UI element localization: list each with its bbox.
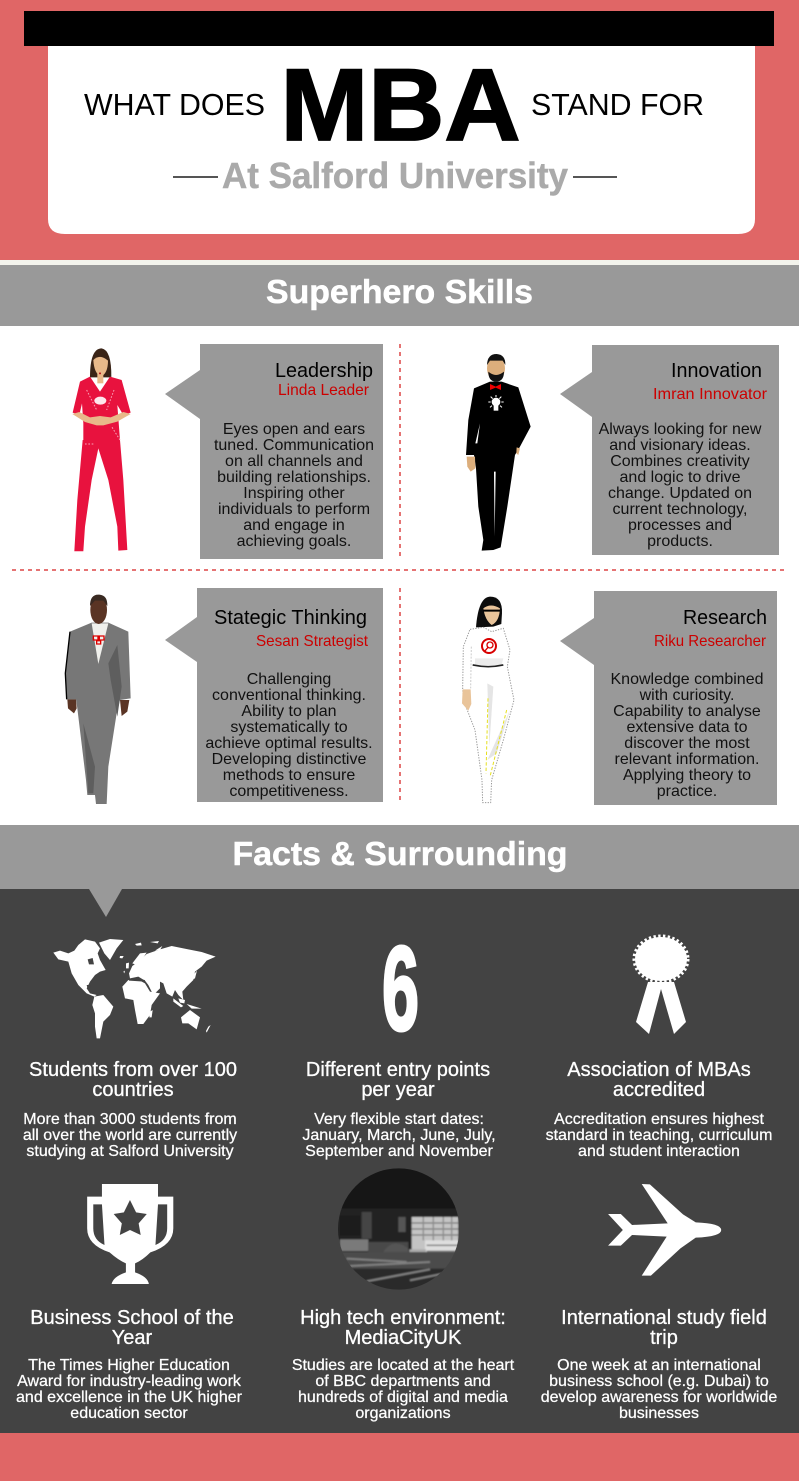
heading: accredited [613, 1079, 705, 1101]
icon: ribbon rosette [635, 937, 687, 1034]
description: Very flexible start dates: [314, 1111, 484, 1128]
description: standard in teaching, curriculum [546, 1127, 772, 1144]
subtitle: At Salford University [222, 155, 568, 196]
description: all over the world are currently [23, 1127, 237, 1144]
description: and excellence in the UK higher [16, 1389, 243, 1406]
description: One week at an international [557, 1357, 761, 1374]
description: relevant information. [615, 751, 759, 768]
description: processes and [628, 517, 732, 534]
figure: Linda Leader [72, 348, 131, 551]
fact: students [23, 939, 237, 1160]
description: current technology, [613, 501, 747, 518]
description: competitiveness. [229, 783, 349, 800]
title: STAND FOR [531, 87, 704, 122]
description: studying at Salford University [26, 1143, 234, 1160]
panel: facts background [0, 889, 799, 1433]
description: September and November [305, 1143, 494, 1160]
description: on all channels and [225, 453, 363, 470]
description: Ability to plan [241, 703, 337, 720]
icon: world map [53, 939, 216, 1038]
figure: Sesan Strategist [65, 595, 131, 804]
description: Inspiring other [243, 485, 345, 502]
fact: field trip [541, 1184, 777, 1422]
description: of BBC departments and [315, 1373, 491, 1390]
description: building relationships. [217, 469, 371, 486]
role title: Stategic Thinking [214, 607, 367, 629]
description: change. Updated on [608, 485, 752, 502]
panel: Research [462, 591, 777, 805]
description: business school (e.g. Dubai) to [549, 1373, 769, 1390]
description: Accreditation ensures highest [554, 1111, 764, 1128]
description: tuned. Communication [214, 437, 374, 454]
icon: airplane [608, 1184, 721, 1276]
description: education sector [70, 1405, 188, 1422]
heading: International study field [561, 1307, 767, 1329]
heading: trip [650, 1327, 678, 1349]
title: WHAT DOES [84, 87, 265, 122]
title: MBA [280, 48, 520, 162]
heading: Facts & Surrounding [0, 825, 799, 917]
role title: Innovation [671, 360, 762, 382]
role title: Research [683, 607, 767, 629]
panel: Strategic Thinking [65, 588, 383, 804]
fact: accreditation [546, 937, 772, 1160]
heading: Students from over 100 [29, 1059, 237, 1081]
speech box [165, 588, 383, 802]
description: More than 3000 students from [23, 1111, 237, 1128]
description: Eyes open and ears [223, 421, 365, 438]
description: Studies are located at the heart [292, 1357, 515, 1374]
panel: Innovation [466, 345, 779, 555]
heading: Superhero Skills [0, 265, 799, 326]
description: and logic to drive [620, 469, 741, 486]
character name: Sesan Strategist [256, 633, 369, 650]
description: achieve optimal results. [205, 735, 373, 752]
heading: Business School of the [30, 1307, 234, 1329]
header panel [0, 0, 799, 265]
heading: per year [361, 1079, 435, 1101]
description: discover the most [624, 735, 750, 752]
role title: Leadership [275, 360, 373, 382]
description: Award for industry-leading work [17, 1373, 242, 1390]
heading: countries [92, 1079, 174, 1101]
description: Challenging [247, 671, 331, 688]
description: and engage in [243, 517, 345, 534]
description: develop awareness for worldwide [541, 1389, 777, 1406]
heading: Year [112, 1327, 153, 1349]
figure: Riku Researcher [462, 597, 514, 803]
panel: Leadership [72, 344, 383, 559]
heading: Superhero Skills: Superhero Skills [266, 273, 533, 310]
character name: Riku Researcher [654, 633, 767, 650]
description: Combines creativity [610, 453, 750, 470]
description: Always looking for new [599, 421, 762, 438]
speech box [560, 345, 779, 555]
description: products. [647, 533, 713, 550]
heading: MediaCityUK [345, 1327, 462, 1349]
description: The Times Higher Education [28, 1357, 230, 1374]
description: systematically to [230, 719, 348, 736]
heading: Facts & Surrounding: Facts & Surrounding [232, 835, 568, 872]
title [84, 48, 704, 162]
character name: Imran Innovator [653, 386, 768, 403]
description: Knowledge combined [610, 671, 764, 688]
title card [24, 11, 774, 234]
icon: round city photo [335, 1165, 463, 1292]
description: conventional thinking. [212, 687, 366, 704]
footer strip [0, 1433, 799, 1481]
description: organizations [355, 1405, 451, 1422]
description: individuals to perform [218, 501, 370, 518]
description: Developing distinctive [212, 751, 366, 768]
heading: Different entry points [306, 1059, 490, 1081]
description: businesses [619, 1405, 699, 1422]
fact: MediaCityUK [292, 1165, 515, 1422]
description: methods to ensure [223, 767, 355, 784]
heading: High tech environment: [300, 1307, 506, 1329]
character name: Linda Leader [278, 382, 370, 399]
description: and student interaction [578, 1143, 740, 1160]
description: Capability to analyse [613, 703, 761, 720]
speech box [165, 344, 383, 559]
description: Applying theory to [623, 767, 751, 784]
fact: entry points [302, 921, 496, 1160]
speech box [560, 591, 777, 805]
description: January, March, June, July, [302, 1127, 496, 1144]
description: practice. [657, 783, 717, 800]
description: extensive data to [627, 719, 748, 736]
fact: business school [16, 1184, 243, 1422]
description: hundreds of digital and media [298, 1389, 508, 1406]
description: and visionary ideas. [609, 437, 751, 454]
description: achieving goals. [237, 533, 351, 550]
figure: Imran Innovator [466, 354, 531, 551]
description: with curiosity. [639, 687, 734, 704]
icon: number six: 6 [382, 921, 419, 1056]
icon: trophy [87, 1184, 173, 1284]
heading: Association of MBAs [567, 1059, 751, 1081]
